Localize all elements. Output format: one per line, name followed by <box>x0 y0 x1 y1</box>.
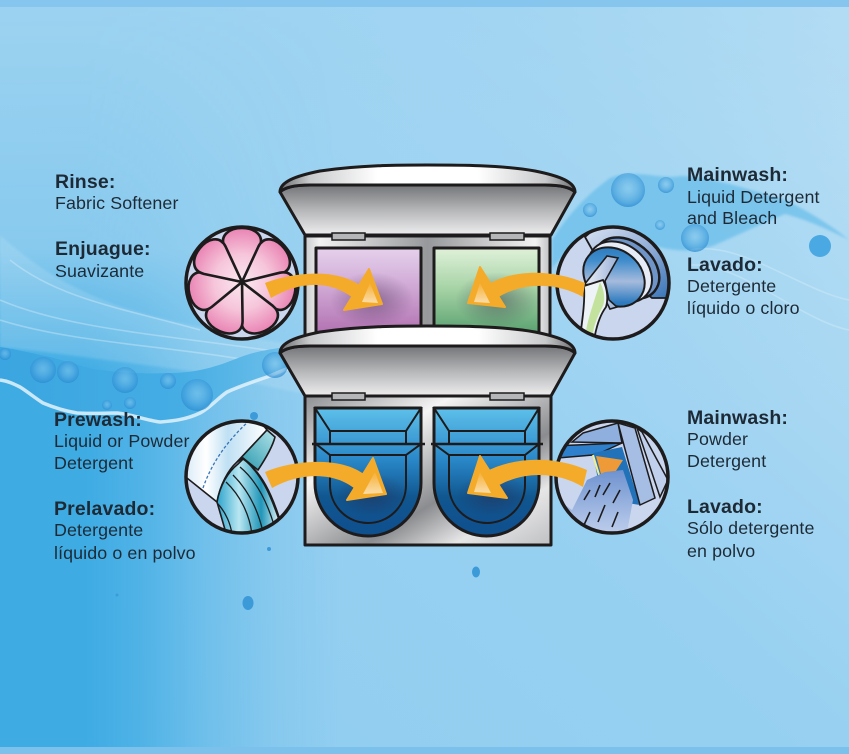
text: mainwash liquid: Lavado: <box>687 254 763 276</box>
lower lid <box>280 326 575 396</box>
text: mainwash powder: Sólo detergente <box>687 518 814 538</box>
upper tray <box>305 236 550 346</box>
text: mainwash liquid: and Bleach <box>687 208 777 228</box>
lower dispenser <box>280 326 575 545</box>
text: mainwash liquid <box>687 164 820 318</box>
text: prewash: líquido o en polvo <box>54 543 196 563</box>
lower hinges <box>332 393 524 400</box>
compartment: purple <box>316 248 421 338</box>
text: rinse <box>55 171 178 281</box>
text: mainwash powder: Detergent <box>687 451 766 471</box>
text: mainwash powder: Powder <box>687 429 748 449</box>
water wave: right <box>552 173 849 330</box>
text: rinse: Enjuague: <box>55 238 151 260</box>
droplets <box>116 412 480 610</box>
icon: prewash chute <box>180 415 298 540</box>
text: prewash: Detergente <box>54 520 143 540</box>
lower tray <box>305 396 551 545</box>
text: prewash <box>54 409 196 563</box>
text: mainwash liquid: Liquid Detergent <box>687 187 820 207</box>
arrow: powder to right compartment <box>468 456 587 498</box>
text: mainwash powder: Mainwash: <box>687 407 788 429</box>
upper hinges <box>332 233 524 240</box>
compartment: left prewash <box>312 408 425 536</box>
arrow: softener to purple compartment <box>265 269 382 310</box>
water wave: left <box>0 235 310 422</box>
text: prewash: Detergent <box>54 453 133 473</box>
arrow: bleach to green compartment <box>468 267 585 307</box>
text: prewash: Liquid or Powder <box>54 431 190 451</box>
icon: powder pouring <box>552 421 668 540</box>
text: mainwash powder <box>687 407 814 561</box>
compartment: right mainwash <box>431 408 543 536</box>
text: mainwash liquid: líquido o cloro <box>687 298 800 318</box>
text: mainwash powder: Lavado: <box>687 496 763 518</box>
text: mainwash powder: en polvo <box>687 541 755 561</box>
upper lid <box>280 165 575 235</box>
text: mainwash liquid: Detergente <box>687 276 776 296</box>
upper dispenser <box>280 165 575 346</box>
text: prewash: Prewash: <box>54 409 142 431</box>
text: rinse: Suavizante <box>55 261 144 281</box>
compartment: green <box>434 248 539 338</box>
icon: liquid bottle cap pouring <box>557 224 676 339</box>
text: prewash: Prelavado: <box>54 498 155 520</box>
text: mainwash liquid: Mainwash: <box>687 164 788 186</box>
text: rinse: Rinse: <box>55 171 116 193</box>
text: rinse: Fabric Softener <box>55 193 178 213</box>
arrow: prewash to left compartment <box>265 458 386 500</box>
icon: flower softener <box>185 227 299 339</box>
